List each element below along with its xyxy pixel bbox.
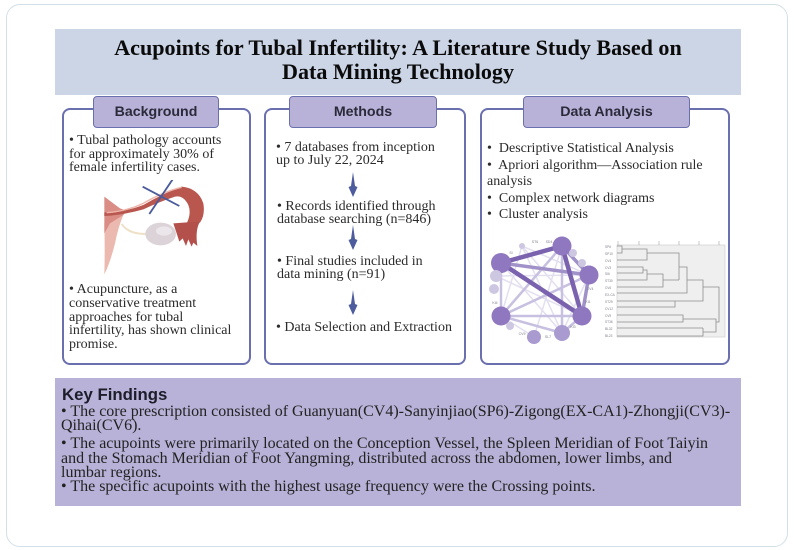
text: acupuncture: promise. [69,337,118,352]
chart: cluster dendrogram: ST36 [605,320,613,324]
text: databases: up to July 22, 2024 [276,153,384,168]
text: acupoint location: and the Stomach Meridian of Foot Yangming, distributed across the abdomen, lower limbs, and [61,450,672,467]
chart: acupoint network: KI3 [570,325,576,329]
chart: acupoint network: ST6 [532,240,538,244]
chart: cluster dendrogram: BL32 [605,327,613,331]
text: acupuncture: infertility, has shown clinical [69,323,231,338]
text: acupuncture: conservative treatment [69,296,196,311]
chart: cluster dendrogram: SP10 [605,252,613,256]
chart: cluster dendrogram: BL23 [605,334,613,338]
heading: data analysis: Data Analysis [560,104,653,120]
chart: acupoint network: SI [509,251,513,255]
heading: background [93,96,219,128]
text: acupuncture: • Acupuncture, as a [69,282,177,297]
chart: acupoint network [489,236,598,344]
text: analysis methods [487,141,703,222]
text: records: • Records identified through [277,199,435,214]
panel: key findings [55,378,741,506]
heading: methods [289,96,437,128]
chart: acupoint network: KI1 [585,300,591,304]
text: acupuncture: approaches for tubal [69,310,183,325]
text: analysis methods: • Complex network diagrams [487,191,654,206]
title [114,35,682,84]
text: acupoint location: • The acupoints were primarily located on the Conception Vessel, the Spleen Meridian of Foot Taiyin [61,435,708,452]
panel: data analysis [480,108,730,365]
heading: data analysis [523,96,690,128]
arrow: down 3 [348,290,358,315]
title: Data Mining Technology [282,59,514,84]
chart: cluster dendrogram: SI6 [605,272,610,276]
text: final studies: data mining (n=91) [277,267,385,282]
chart: cluster dendrogram: EX-CA [605,293,616,297]
text: analysis methods: • Descriptive Statistical Analysis [487,141,674,156]
panel: background [62,108,251,365]
chart: cluster dendrogram: CV9 [605,314,611,318]
chart: cluster dendrogram: ST29 [605,300,613,304]
text: analysis methods: • Apriori algorithm—Association rule [487,158,703,173]
text: core prescription: • The core prescription consisted of Guanyuan(CV4)-Sanyinjiao(SP6)-Zigong(EX-CA1)-Zhongji(CV3)- [61,403,730,420]
text: core prescription: Qihai(CV6). [61,417,141,434]
text: analysis methods: • Cluster analysis [487,207,588,222]
text: usage frequency: • The specific acupoints with the highest usage frequency were the Crossing points. [61,478,596,495]
text: analysis methods: analysis [487,174,532,189]
text: databases [276,140,435,168]
text: acupoint location [61,435,708,481]
icon: uterus and blocked fallopian tube [104,180,204,274]
text: records: database searching (n=846) [277,212,431,227]
chart: acupoint network: CV4 [587,287,593,291]
arrow: down 1 [348,172,358,197]
title band [55,29,741,95]
text: acupoint location: lumbar regions. [61,464,161,481]
arrow: down 2 [348,225,358,250]
text: tubal pathology [69,133,221,175]
text: records [277,199,436,227]
chart: acupoint network: SL7 [545,335,551,339]
chart: cluster dendrogram: ST30 [605,279,613,283]
chart: cluster dendrogram: CV6 [605,286,611,290]
chart: acupoint network: SD4 [546,240,552,244]
chart: cluster dendrogram [605,241,726,338]
icon: cross mark [143,178,179,214]
text: final studies: • Final studies included in [277,254,423,269]
heading: background: Background [115,104,197,120]
heading: key findings: Key Findings [62,385,167,404]
chart: acupoint network: CV9 [519,332,525,336]
text: acupuncture [69,282,232,352]
text: final studies [277,254,423,282]
heading: methods: Methods [334,104,392,120]
chart: cluster dendrogram: CV4 [605,259,611,263]
text: data selection: • Data Selection and Extraction [276,320,452,335]
chart: cluster dendrogram: CV12 [605,307,613,311]
panel: methods [264,108,466,365]
text: tubal pathology: • Tubal pathology accounts [69,133,221,148]
text: tubal pathology: for approximately 30% of [69,146,214,162]
title: Acupoints for Tubal Infertility: A Literature Study Based on [114,35,682,60]
chart: cluster dendrogram: SP6 [605,245,611,249]
text: core prescription [61,403,730,434]
chart: acupoint network: KI4 [492,301,498,305]
text: tubal pathology: female infertility cases. [69,160,200,175]
text: databases: • 7 databases from inception [276,140,435,155]
chart: cluster dendrogram: CV3 [605,266,611,270]
